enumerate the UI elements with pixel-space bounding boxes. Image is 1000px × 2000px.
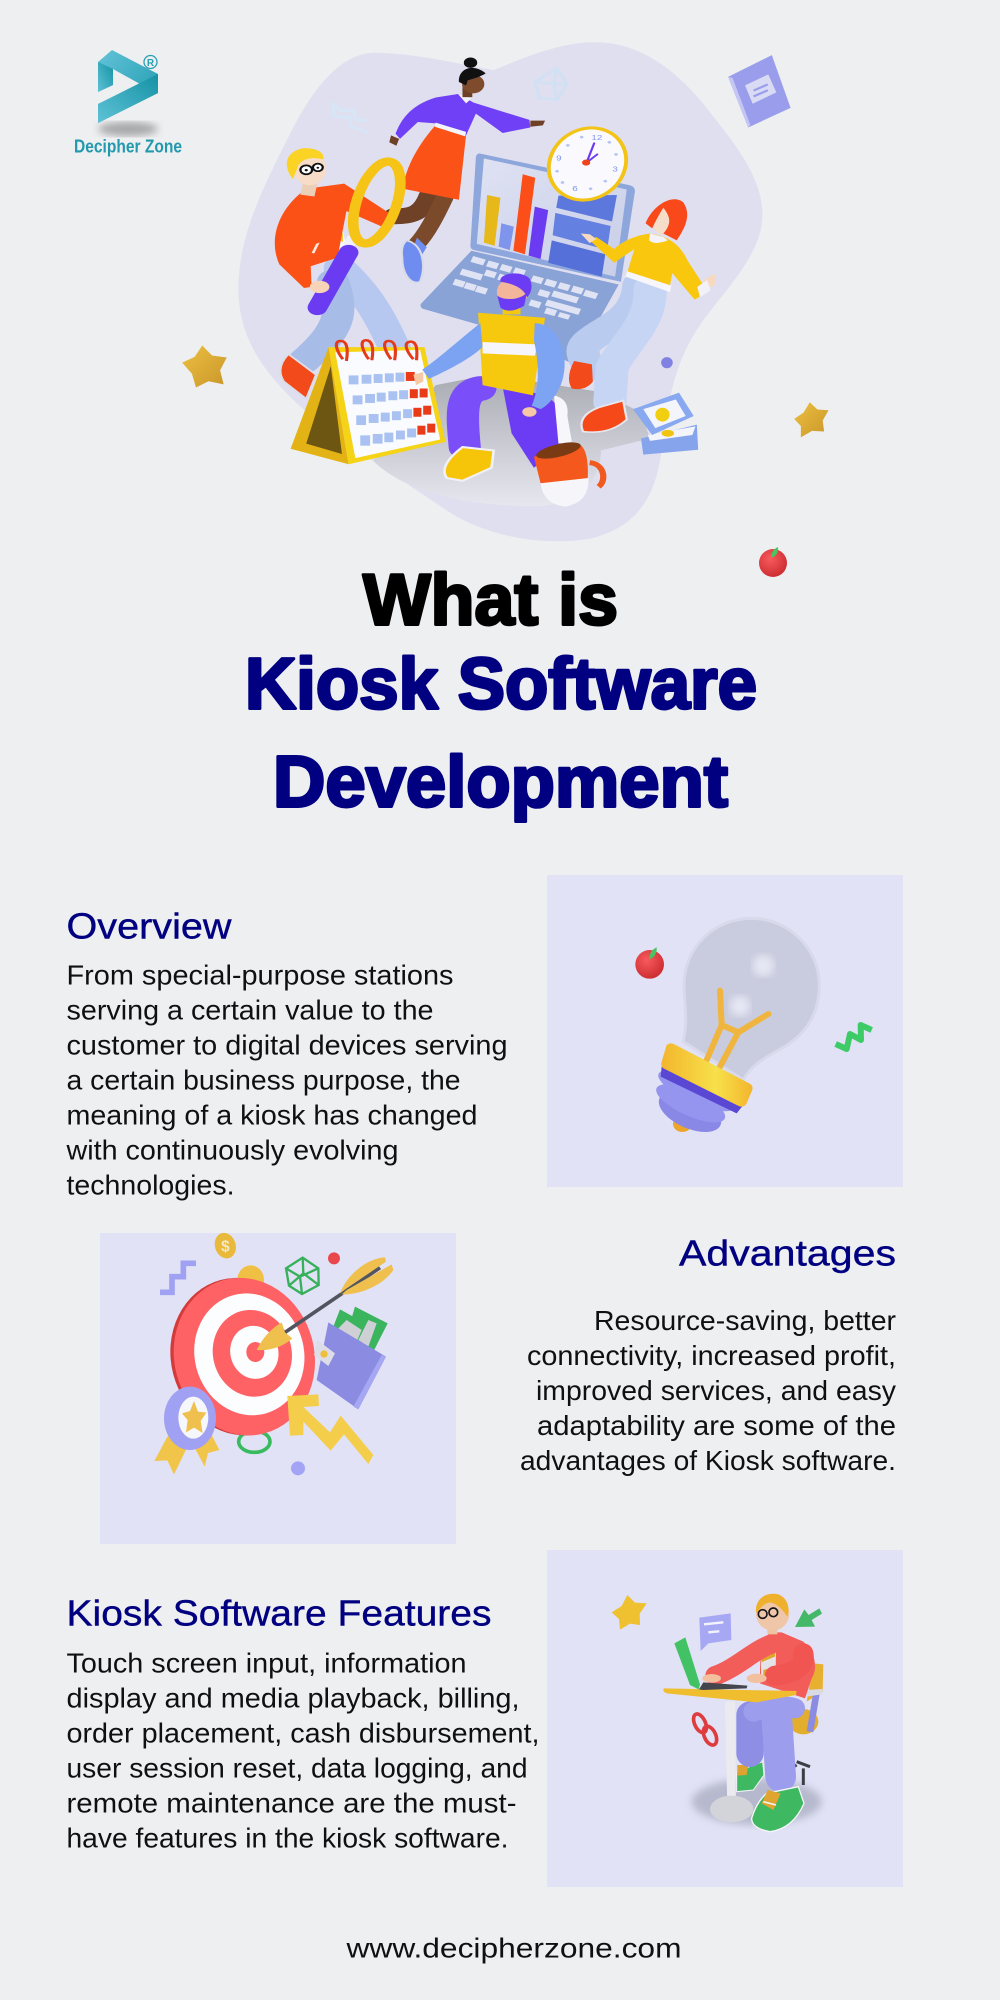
clock: 6 [572, 184, 578, 193]
features body text [66, 1648, 540, 1854]
title: Kiosk Software [245, 644, 757, 724]
overview body text: meaning of a kiosk has changed [66, 1099, 477, 1130]
panel: overview text [65, 906, 508, 1200]
coffee mug [534, 439, 603, 507]
clock: 3 [612, 165, 618, 173]
panel: target illustration [100, 1230, 456, 1544]
title: What is [363, 560, 618, 640]
icon: chat bubble [699, 1613, 731, 1651]
icon: upward yellow arrow [287, 1394, 373, 1464]
clock: 12 [591, 133, 602, 142]
icon: arrow in bullseye [257, 1257, 393, 1350]
icon: light bulb [651, 918, 819, 1140]
overview body text: serving a certain value to the [66, 994, 434, 1025]
zigzag decoration [333, 103, 369, 133]
icon: green zigzag [836, 1025, 872, 1049]
advantages body text: connectivity, increased profit, [527, 1340, 896, 1371]
footer: website address: www.decipherzone.com [345, 1932, 682, 1963]
wall calendar [291, 340, 446, 464]
panel: advantages text [520, 1232, 896, 1476]
man in orange jacket with magnifying glass [275, 148, 409, 399]
advantages body text: advantages of Kiosk software. [520, 1445, 896, 1476]
icon: green arrow [795, 1608, 822, 1627]
heading: Overview: Overview [66, 906, 233, 946]
desk with laptop [663, 1637, 797, 1822]
floating dots [291, 1252, 340, 1475]
icon: green cube [286, 1258, 319, 1294]
wireframe cube [535, 68, 567, 100]
hero background blob [238, 42, 762, 541]
features body text: remote maintenance are the must- [66, 1788, 516, 1819]
laptop [421, 154, 635, 364]
overview body text: From special-purpose stations [66, 959, 453, 990]
panel: light bulb illustration [547, 875, 903, 1187]
gold star left [182, 345, 227, 387]
heading: Kiosk Software Features: Kiosk Software Features [66, 1592, 492, 1633]
floating purple dot [661, 357, 673, 368]
woman in yellow sweater [569, 199, 716, 432]
features body text: have features in the kiosk software. [66, 1823, 508, 1854]
hero illustration: team around a laptop [182, 42, 829, 541]
icon: coins [211, 1230, 264, 1295]
overview body text: technologies. [66, 1169, 234, 1200]
apple decoration [759, 547, 787, 577]
person sitting at desk [702, 1594, 823, 1832]
logo: Decipher Zone: R [147, 58, 155, 69]
icon: award medal [154, 1387, 219, 1474]
advantages body text: adaptability are some of the [537, 1410, 896, 1441]
advantages body text [520, 1305, 896, 1476]
icon: target [153, 1262, 332, 1451]
features body text: order placement, cash disbursement, [66, 1718, 540, 1749]
floating book [728, 55, 791, 127]
features body text: display and media playback, billing, [66, 1683, 520, 1714]
clock: 9 [556, 154, 562, 162]
icon: coins: $ [221, 1239, 230, 1256]
heading: Advantages: Advantages [679, 1232, 896, 1274]
floor shadow [692, 1778, 822, 1825]
panel: person at desk illustration [547, 1550, 903, 1887]
advantages body text: Resource-saving, better [594, 1305, 896, 1336]
panel: kiosk software features text [66, 1592, 540, 1854]
icon: gold star [612, 1595, 647, 1630]
floor shadow [373, 375, 650, 506]
features body text: user session reset, data logging, and [66, 1753, 528, 1784]
icon: wallet with banknotes [314, 1307, 388, 1409]
overview body text [65, 959, 508, 1200]
features body text: Touch screen input, information [66, 1648, 466, 1679]
icon: purple zigzag [160, 1263, 196, 1292]
seated man with yellow vest [413, 273, 572, 481]
overview body text: with continuously evolving [65, 1134, 398, 1165]
advantages body text: improved services, and easy [536, 1375, 896, 1406]
overview body text: a certain business purpose, the [66, 1064, 460, 1095]
logo: Decipher Zone [74, 50, 182, 156]
clock [539, 121, 636, 207]
icon: red chain link [691, 1712, 719, 1747]
title: Development [273, 742, 728, 822]
title [245, 560, 757, 822]
overview body text: customer to digital devices serving [66, 1029, 508, 1060]
woman in purple top and orange skirt [389, 58, 545, 282]
gold star right [794, 402, 829, 437]
logo: Decipher Zone: Decipher Zone [74, 136, 182, 156]
icon: apple [635, 947, 664, 979]
money stack [633, 393, 698, 455]
icon: green ring [239, 1431, 270, 1452]
